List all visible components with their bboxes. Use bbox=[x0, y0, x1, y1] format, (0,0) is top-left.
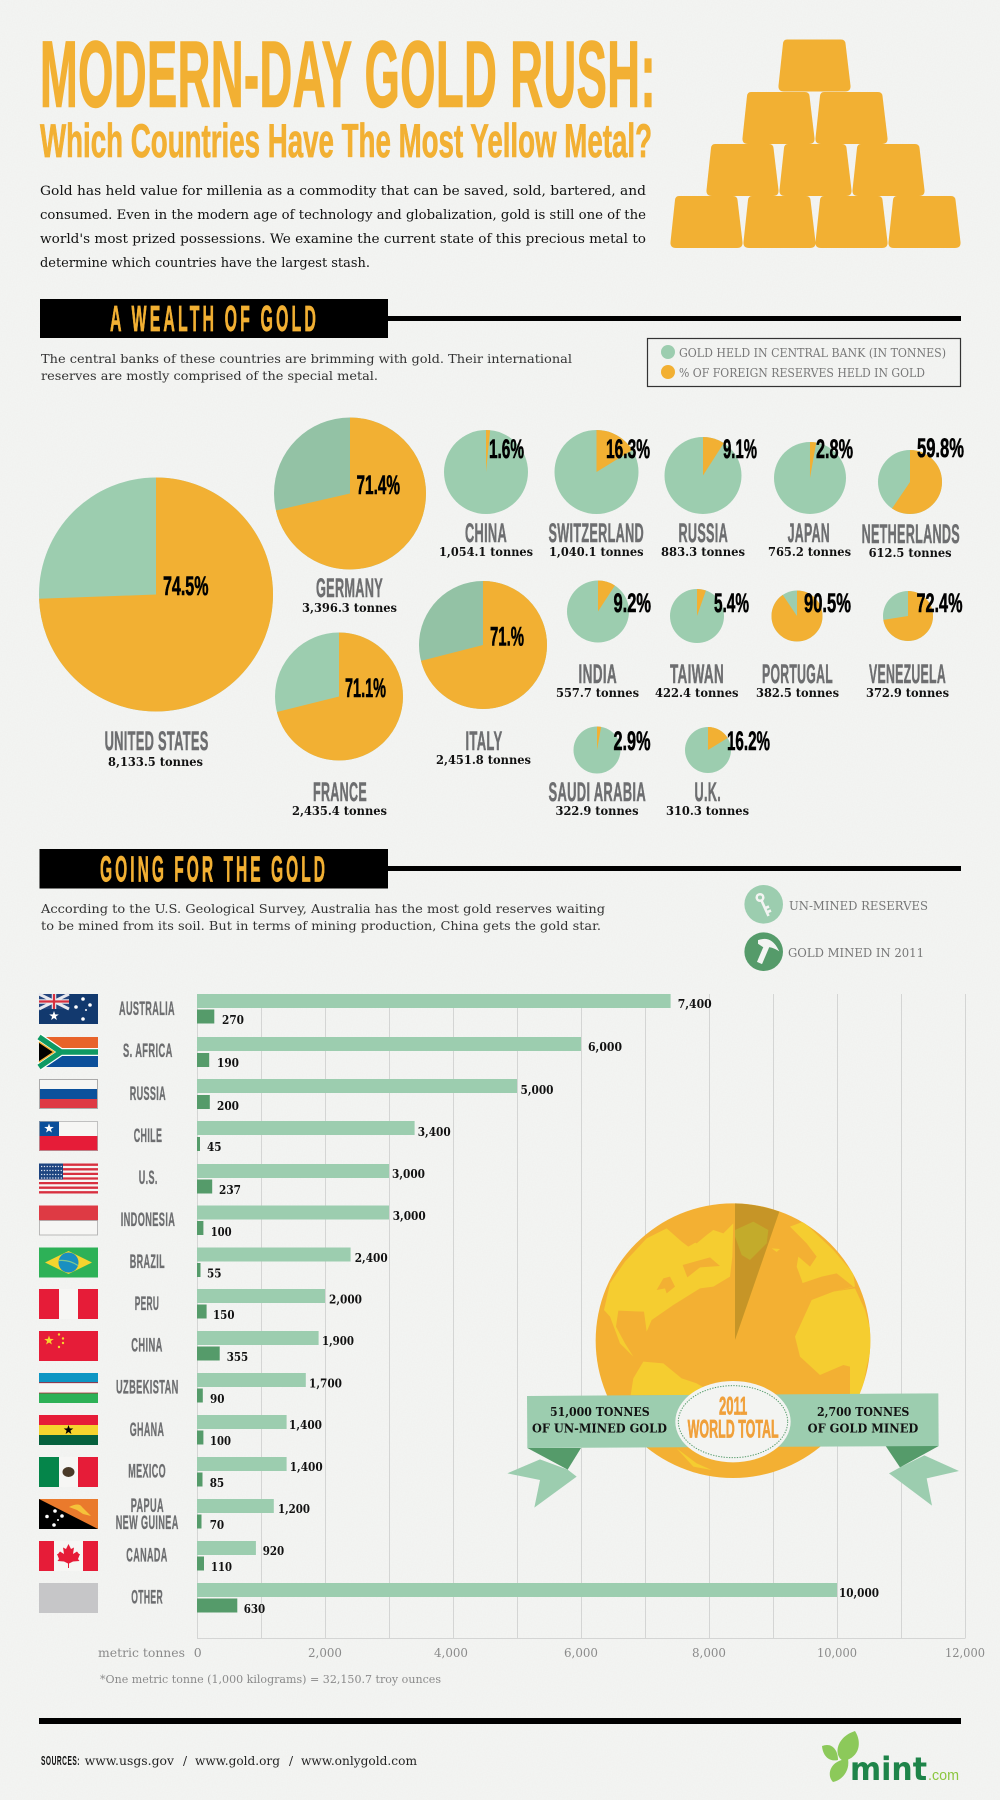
pie: Portugal: 90.5% bbox=[804, 588, 851, 618]
intro text block: Gold has held value for millenia as a commodity that can be saved, sold, bartered, and bbox=[40, 184, 646, 199]
pie: U.K.: 310.3 tonnes bbox=[666, 804, 749, 818]
bar chart: gridlines and axis: 0 bbox=[194, 1645, 202, 1660]
legend: gold mined with hammer icon bbox=[744, 932, 924, 971]
logo: mint.com: .com bbox=[928, 1767, 959, 1784]
row: Brazil bbox=[39, 1248, 388, 1280]
row: Chile bbox=[39, 1121, 451, 1154]
mined total: 2,700 TONNES bbox=[817, 1405, 909, 1419]
pie: Switzerland: 1,040.1 tonnes bbox=[549, 545, 644, 559]
bar chart: gridlines and axis: 8,000 bbox=[692, 1645, 726, 1660]
pie: Saudi Arabia bbox=[548, 726, 650, 818]
pie: U.K. bbox=[666, 726, 770, 818]
pie: Italy: ITALY bbox=[466, 726, 502, 756]
pie: Switzerland: 16.3% bbox=[606, 434, 650, 464]
bar chart: gridlines and axis: 12,000 bbox=[945, 1645, 985, 1660]
pie: Portugal: 382.5 tonnes bbox=[756, 686, 839, 700]
row: Brazil: 2,400 bbox=[355, 1251, 388, 1265]
row: U.S.: U.S. bbox=[139, 1167, 158, 1189]
row: Uzbekistan: UZBEKISTAN bbox=[116, 1376, 179, 1398]
row: Indonesia: 100 bbox=[211, 1225, 232, 1239]
row: Indonesia: 3,000 bbox=[393, 1209, 426, 1223]
row: Papua New Guinea: 70 bbox=[210, 1518, 224, 1532]
row: Ghana: 100 bbox=[210, 1434, 231, 1448]
row: Uzbekistan: 1,700 bbox=[309, 1376, 342, 1390]
pie: Germany: 71.4% bbox=[356, 470, 400, 500]
pie: United States: 74.5% bbox=[163, 571, 208, 601]
legend: un-mined reserves with key icon: UN-MINED RESERVES bbox=[789, 899, 928, 913]
row: Chile: 3,400 bbox=[418, 1125, 451, 1139]
badge: 2011 world total: 2011 bbox=[719, 1393, 747, 1420]
legend: pies bbox=[648, 338, 960, 386]
pie: Japan: 2.8% bbox=[816, 434, 853, 464]
pie: China: CHINA bbox=[465, 518, 507, 548]
section heading: a wealth of gold: A WEALTH OF GOLD bbox=[110, 298, 319, 339]
row: Russia: 200 bbox=[217, 1099, 239, 1113]
row: China: CHINA bbox=[131, 1334, 163, 1356]
row: Peru: 2,000 bbox=[329, 1292, 362, 1306]
legend: pies: GOLD HELD IN CENTRAL BANK (IN TONNES) bbox=[679, 346, 946, 360]
row: Canada: 920 bbox=[263, 1544, 284, 1558]
section intro: geological survey: According to the U.S. Geological Survey, Australia has the most gold reserves waiting bbox=[40, 902, 605, 916]
pie: China: 1,054.1 tonnes bbox=[439, 545, 533, 559]
badge: 2011 world total bbox=[675, 1381, 791, 1462]
sources bbox=[41, 1753, 418, 1768]
row: Other: 10,000 bbox=[839, 1586, 879, 1600]
pie: Saudi Arabia: 2.9% bbox=[614, 726, 650, 756]
pie: Russia: 9.1% bbox=[723, 434, 757, 464]
bar chart: gridlines and axis: metric tonnes bbox=[98, 1645, 185, 1660]
row: Indonesia: INDONESIA bbox=[121, 1209, 175, 1231]
bar chart: gridlines and axis: 6,000 bbox=[564, 1645, 598, 1660]
pie: Portugal bbox=[756, 588, 851, 700]
text: SWITZERLAND bbox=[548, 518, 644, 548]
row: Ghana: 1,400 bbox=[289, 1418, 322, 1432]
section heading: going for the gold bbox=[40, 848, 961, 890]
section intro: central banks: reserves are mostly comprised of the special metal. bbox=[41, 369, 378, 383]
pie: Venezuela: 372.9 tonnes bbox=[866, 686, 949, 700]
legend: un-mined reserves with key icon bbox=[744, 885, 928, 924]
pie: Saudi Arabia: 322.9 tonnes bbox=[556, 804, 639, 818]
sources: / bbox=[289, 1754, 294, 1768]
pie: U.K.: U.K. bbox=[694, 777, 721, 807]
pie: United States: 8,133.5 tonnes bbox=[108, 755, 203, 769]
row: U.S. bbox=[39, 1164, 425, 1197]
bar chart: gridlines and axis: 4,000 bbox=[434, 1645, 468, 1660]
row: Mexico: 85 bbox=[210, 1476, 224, 1490]
row: Chile: CHILE bbox=[134, 1125, 162, 1147]
row: Other: OTHER bbox=[131, 1586, 163, 1608]
pie: Germany bbox=[274, 418, 426, 615]
row: China: 1,900 bbox=[322, 1334, 354, 1348]
sources: www.usgs.gov bbox=[85, 1754, 174, 1768]
sources: / bbox=[183, 1754, 188, 1768]
bar chart: gridlines and axis: 2,000 bbox=[308, 1645, 342, 1660]
row: Papua New Guinea bbox=[39, 1495, 310, 1534]
pie: Germany: GERMANY bbox=[316, 573, 383, 603]
pie: Netherlands bbox=[862, 433, 964, 560]
pie: Germany: 3,396.3 tonnes bbox=[302, 601, 397, 615]
row: U.S.: 3,000 bbox=[392, 1167, 425, 1181]
un-mined total: OF UN-MINED GOLD bbox=[532, 1421, 667, 1435]
pie: Taiwan: 5.4% bbox=[714, 588, 749, 618]
row: Indonesia bbox=[39, 1206, 426, 1239]
pie: Venezuela: 72.4% bbox=[916, 588, 962, 618]
pie: France: FRANCE bbox=[313, 777, 367, 807]
pie: U.K.: 16.2% bbox=[727, 726, 770, 756]
section intro: central banks: The central banks of these countries are brimming with gold. Their international bbox=[41, 352, 572, 366]
row: Peru bbox=[39, 1289, 362, 1322]
ribbon tails bbox=[507, 1446, 959, 1508]
pie: Taiwan: TAIWAN bbox=[670, 659, 724, 689]
section intro: central banks bbox=[41, 352, 572, 383]
row: Peru: 150 bbox=[213, 1308, 234, 1322]
row: Uzbekistan bbox=[39, 1373, 342, 1406]
sources: www.onlygold.com bbox=[301, 1754, 418, 1768]
row: Mexico: 1,400 bbox=[290, 1460, 323, 1474]
pie: India: 557.7 tonnes bbox=[556, 686, 639, 700]
pie: Italy bbox=[419, 581, 547, 767]
row: S. Africa: S. AFRICA bbox=[123, 1040, 173, 1062]
pie: India: 9.2% bbox=[614, 588, 651, 618]
pie: Netherlands: 612.5 tonnes bbox=[869, 546, 952, 560]
pie: United States: UNITED STATES bbox=[105, 726, 209, 756]
intro text block bbox=[40, 184, 646, 271]
pie: Saudi Arabia: SAUDI ARABIA bbox=[548, 777, 646, 807]
row: Papua New Guinea: PAPUA bbox=[131, 1495, 164, 1517]
row: U.S.: 237 bbox=[219, 1183, 241, 1197]
sources: SOURCES: bbox=[41, 1753, 80, 1768]
row: S. Africa: 6,000 bbox=[588, 1040, 622, 1054]
intro text block: world's most prized possessions. We examine the current state of this precious metal to bbox=[40, 232, 646, 247]
pie: France: 71.1% bbox=[345, 673, 386, 703]
pie: France: 2,435.4 tonnes bbox=[292, 804, 387, 818]
icon: stack of gold bars bbox=[670, 40, 961, 248]
section heading: going for the gold: GOING FOR THE GOLD bbox=[100, 848, 328, 890]
pie: Russia: RUSSIA bbox=[678, 518, 728, 548]
row: Canada bbox=[39, 1541, 284, 1574]
row: Chile: 45 bbox=[207, 1140, 222, 1154]
row: Australia: AUSTRALIA bbox=[119, 998, 175, 1020]
row: Russia: 5,000 bbox=[520, 1083, 554, 1097]
row: Canada: 110 bbox=[211, 1560, 232, 1574]
section intro: geological survey bbox=[40, 902, 605, 933]
pie: France bbox=[275, 632, 403, 818]
row: Other bbox=[39, 1583, 879, 1616]
un-mined total: 51,000 TONNES bbox=[550, 1405, 650, 1419]
pie: Japan: 765.2 tonnes bbox=[768, 545, 851, 559]
row: Mexico bbox=[39, 1457, 323, 1490]
pie: Italy: 2,451.8 tonnes bbox=[436, 753, 531, 767]
row: Papua New Guinea: NEW GUINEA bbox=[116, 1512, 179, 1534]
bar chart: gridlines and axis: 10,000 bbox=[817, 1645, 857, 1660]
pie: Netherlands: 59.8% bbox=[917, 433, 964, 463]
row: Australia bbox=[39, 994, 712, 1027]
intro text block: determine which countries have the largest stash. bbox=[40, 256, 370, 271]
section heading: a wealth of gold bbox=[40, 298, 961, 339]
logo: mint.com bbox=[822, 1731, 959, 1788]
footer rule bbox=[39, 1718, 961, 1724]
row: Brazil: BRAZIL bbox=[130, 1251, 165, 1273]
row: S. Africa bbox=[39, 1037, 622, 1070]
row: Papua New Guinea: 1,200 bbox=[278, 1502, 310, 1516]
row: S. Africa: 190 bbox=[217, 1056, 239, 1070]
row: Russia: RUSSIA bbox=[130, 1083, 166, 1105]
row: Peru: PERU bbox=[135, 1293, 159, 1315]
legend: gold mined with hammer icon: GOLD MINED IN 2011 bbox=[788, 946, 924, 960]
mined total: OF GOLD MINED bbox=[808, 1421, 918, 1435]
footnote: *One metric tonne (1,000 kilograms) = 32,150.7 troy ounces bbox=[100, 1672, 441, 1686]
pie: Russia: 883.3 tonnes bbox=[661, 545, 745, 559]
row: Mexico: MEXICO bbox=[128, 1460, 166, 1482]
pie: Russia bbox=[661, 434, 757, 559]
pie: Taiwan bbox=[655, 588, 749, 700]
bar chart: gridlines and axis bbox=[98, 994, 985, 1660]
pie: China bbox=[439, 430, 533, 559]
world total globe and ribbon bbox=[507, 1203, 959, 1508]
pie: Japan: JAPAN bbox=[788, 518, 830, 548]
globe with mined wedge bbox=[596, 1203, 873, 1478]
pie: Portugal: PORTUGAL bbox=[762, 659, 833, 689]
row: Uzbekistan: 90 bbox=[210, 1392, 224, 1406]
section intro: geological survey: to be mined from its soil. But in terms of mining production, China gets the gold star. bbox=[41, 919, 601, 933]
row: Canada: CANADA bbox=[126, 1544, 168, 1566]
row: Russia bbox=[39, 1079, 554, 1113]
ribbon banner bbox=[527, 1393, 939, 1448]
pie: Taiwan: 422.4 tonnes bbox=[655, 686, 739, 700]
pie: Switzerland bbox=[548, 430, 650, 559]
row: China bbox=[39, 1331, 354, 1364]
mined total bbox=[808, 1405, 918, 1435]
row: Brazil: 55 bbox=[207, 1266, 222, 1280]
pie: Italy: 71.% bbox=[490, 622, 524, 652]
pie: United States bbox=[39, 478, 273, 769]
row: Ghana bbox=[39, 1415, 322, 1448]
pie: India bbox=[556, 580, 651, 700]
sources: www.gold.org bbox=[195, 1754, 280, 1768]
row: Ghana: GHANA bbox=[130, 1419, 164, 1441]
logo: mint.com: mint bbox=[850, 1750, 927, 1788]
un-mined total bbox=[532, 1405, 667, 1435]
pie: Japan bbox=[768, 434, 853, 559]
row: China: 355 bbox=[227, 1350, 248, 1364]
pie: Venezuela bbox=[866, 588, 962, 700]
row: Australia: 270 bbox=[222, 1013, 244, 1027]
pie: China: 1.6% bbox=[489, 434, 524, 464]
row: Australia: 7,400 bbox=[678, 997, 712, 1011]
legend: pies: % OF FOREIGN RESERVES HELD IN GOLD bbox=[679, 366, 925, 380]
intro text block: consumed. Even in the modern age of technology and globalization, gold is still one of the bbox=[40, 208, 646, 223]
pie: India: INDIA bbox=[578, 659, 617, 689]
badge: 2011 world total: WORLD TOTAL bbox=[688, 1416, 779, 1444]
row: Other: 630 bbox=[244, 1602, 265, 1616]
